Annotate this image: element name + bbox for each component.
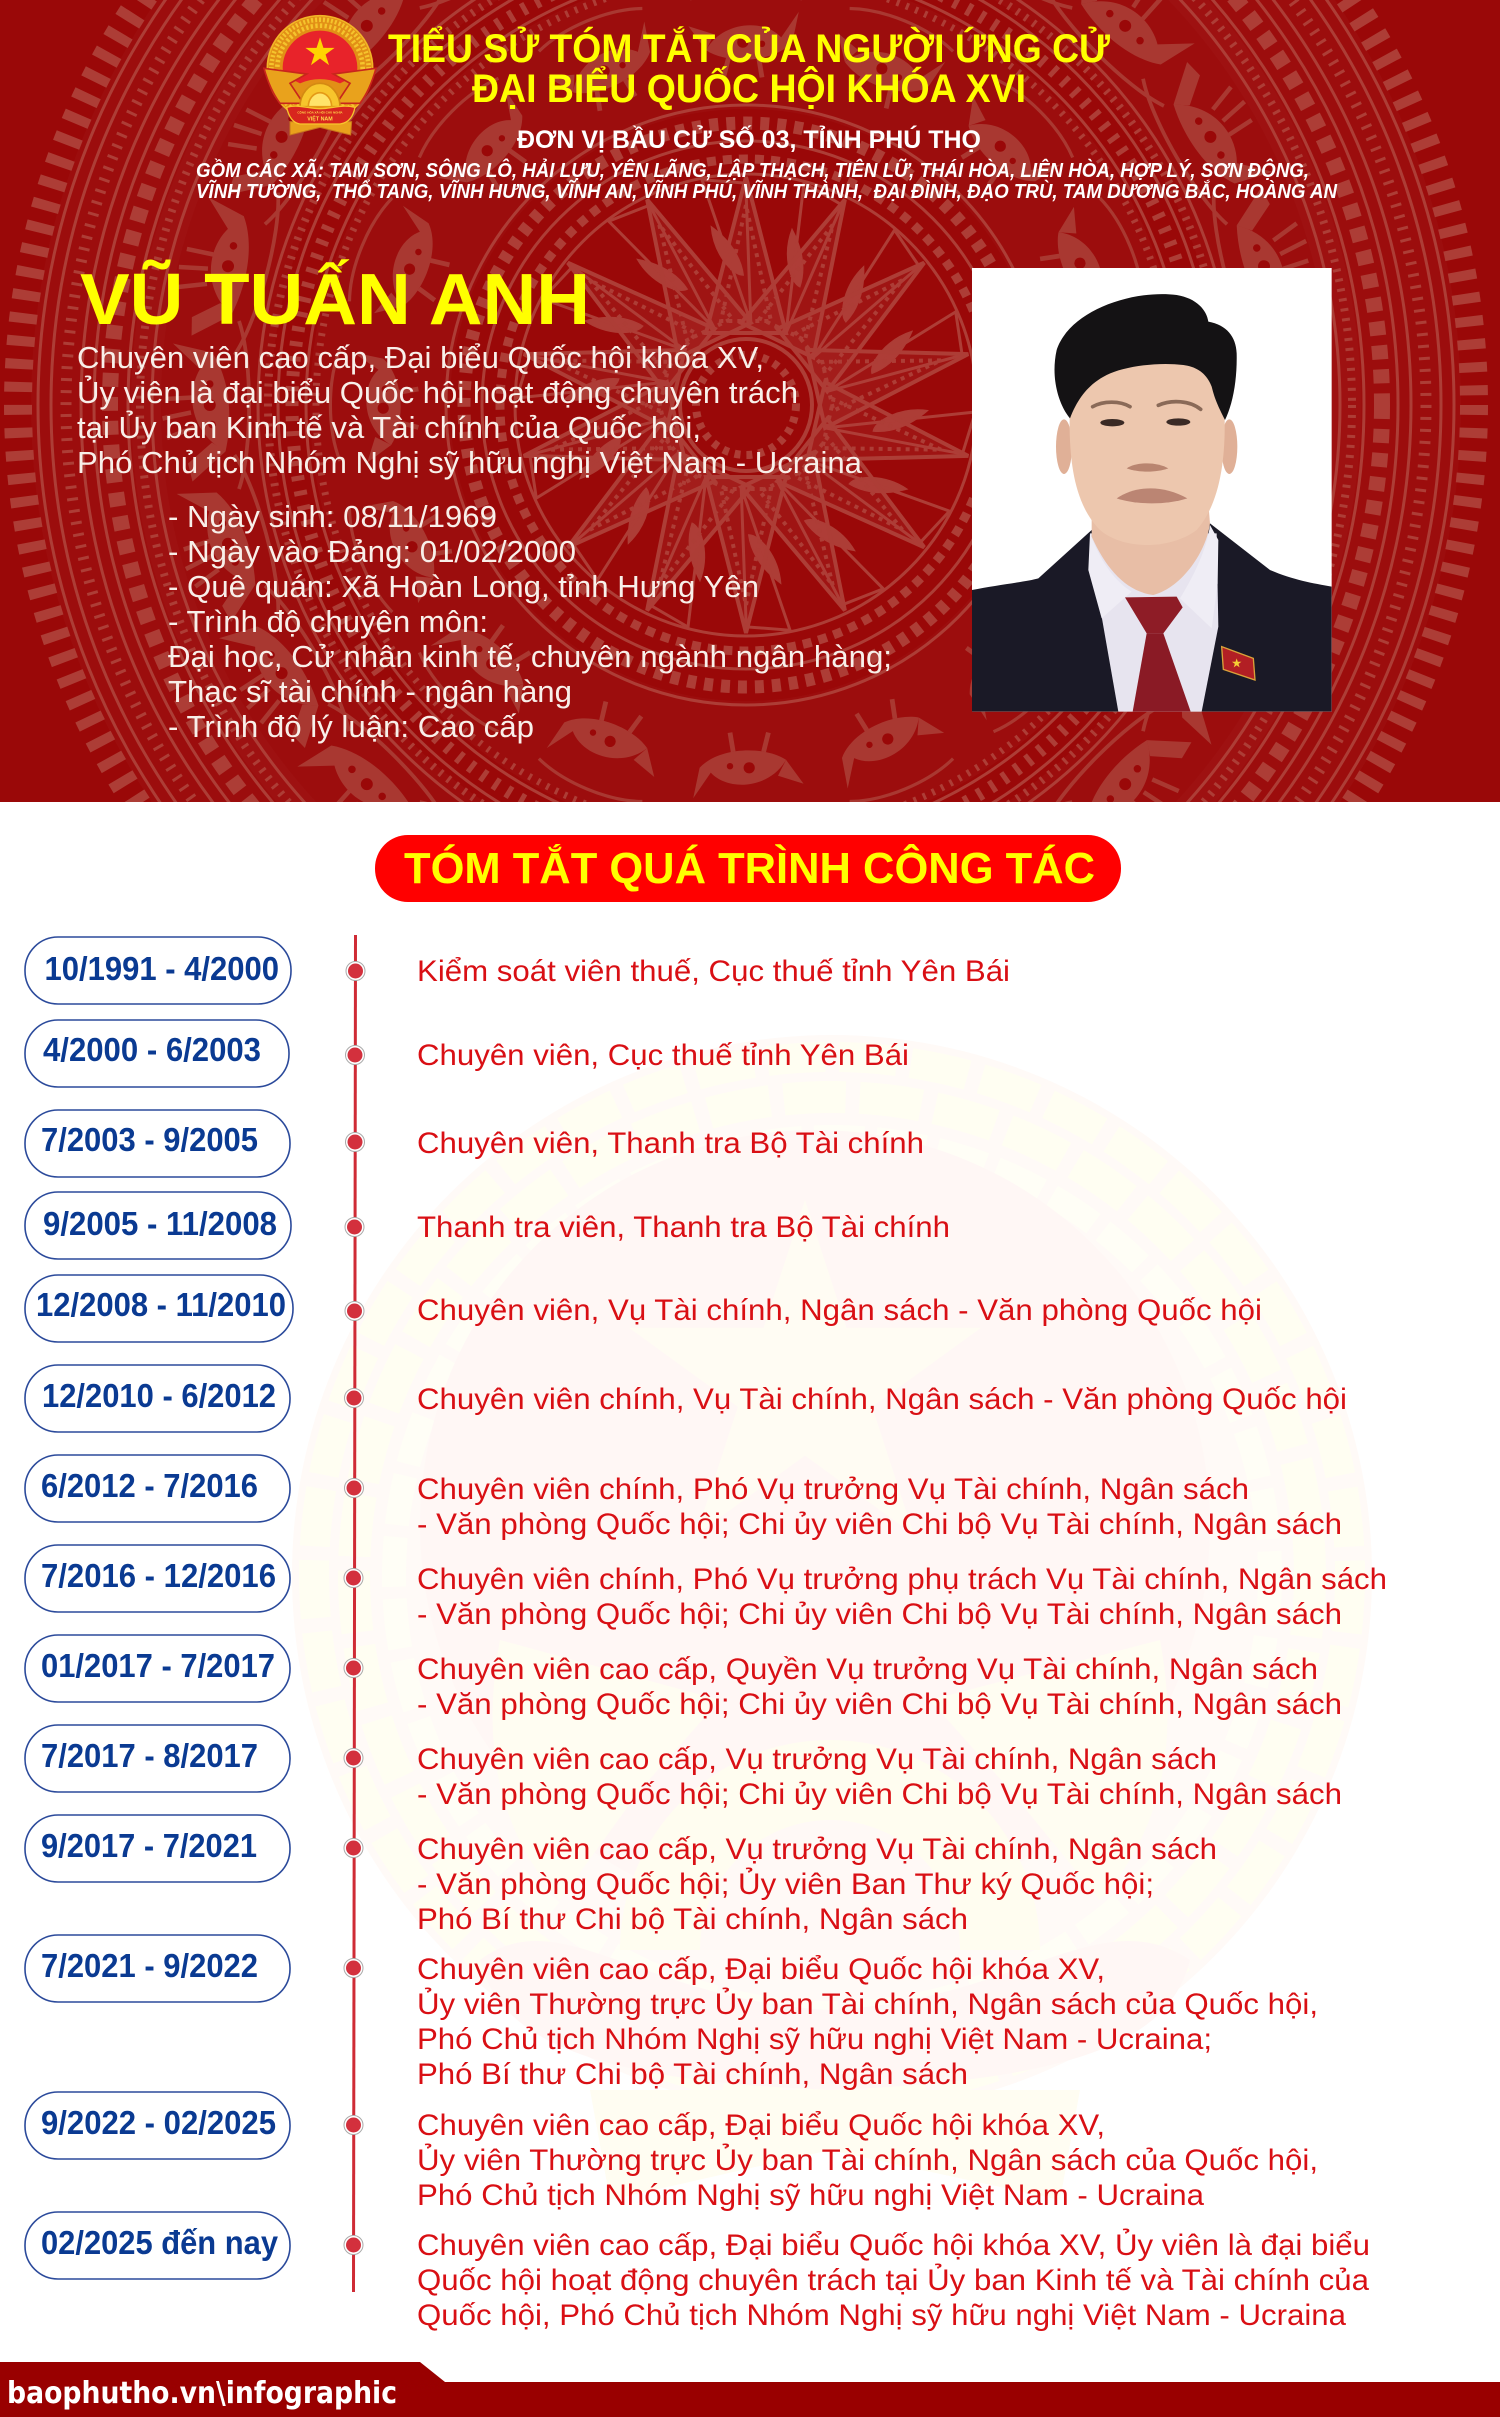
description: Quốc hội, Phó Chủ tịch Nhóm Nghị sỹ hữu nghị Việt Nam - Ucraina — [417, 2299, 1346, 2332]
marker — [344, 1388, 364, 1408]
description: Chuyên viên cao cấp, Vụ trưởng Vụ Tài chính, Ngân sách — [417, 1743, 1217, 1776]
text block: personal details: Thạc sĩ tài chính - ngân hàng — [168, 674, 572, 709]
timeline row 4 — [25, 1192, 950, 1259]
date pill: 7/2003 - 9/2005 — [41, 1121, 258, 1158]
text block: positions: Ủy viên là đại biểu Quốc hội hoạt động chuyên trách — [77, 374, 798, 410]
description: Chuyên viên chính, Phó Vụ trưởng phụ trách Vụ Tài chính, Ngân sách — [417, 1563, 1387, 1596]
icon: national emblem of Vietnam: VIỆT NAM — [307, 114, 333, 122]
marker — [346, 1132, 364, 1152]
date pill: 01/2017 - 7/2017 — [41, 1647, 275, 1684]
title — [388, 24, 1111, 111]
description: - Văn phòng Quốc hội; Ủy viên Ban Thư ký Quốc hội; — [417, 1867, 1154, 1901]
description — [417, 1743, 1342, 1811]
date pill — [25, 1455, 290, 1522]
icon: national emblem of Vietnam: CỘNG HÒA XÃ HỘI CHỦ NGHĨA — [297, 109, 343, 114]
text block: personal details: - Trình độ lý luận: Cao cấp — [168, 709, 534, 744]
timeline row 5 — [25, 1275, 1262, 1342]
description — [417, 1953, 1318, 2091]
timeline row 9 — [25, 1635, 1342, 1721]
date pill — [25, 1545, 290, 1612]
description: - Văn phòng Quốc hội; Chi ủy viên Chi bộ Vụ Tài chính, Ngân sách — [417, 1508, 1342, 1541]
timeline row 7 — [25, 1455, 1342, 1541]
marker — [344, 1478, 364, 1498]
timeline row 8 — [25, 1545, 1387, 1631]
description — [417, 2228, 1370, 2332]
text block: positions: Phó Chủ tịch Nhóm Nghị sỹ hữu nghị Việt Nam - Ucraina — [77, 445, 863, 480]
date pill: 9/2022 - 02/2025 — [41, 2104, 276, 2141]
bronze drum background pattern — [4, 0, 1488, 802]
marker — [344, 1748, 363, 1768]
description: Phó Chủ tịch Nhóm Nghị sỹ hữu nghị Việt Nam - Ucraina; — [417, 2023, 1212, 2056]
date pill: 7/2017 - 8/2017 — [41, 1737, 258, 1774]
footer bar — [0, 2362, 1500, 2417]
text block: communes: GỒM CÁC XÃ: TAM SƠN, SÔNG LÔ, HẢI LỰU, YÊN LÃNG, LẬP THẠCH, TIÊN LỮ, THÁI HÒA, LIÊN HÒA, HỢP LÝ, SƠN ĐỘNG, — [196, 158, 1309, 182]
footer bar: baophutho.vn\infographic — [7, 2376, 397, 2411]
date pill — [25, 937, 291, 1004]
marker — [344, 2116, 363, 2134]
text block: personal details: - Trình độ chuyên môn: — [168, 604, 488, 639]
description: - Văn phòng Quốc hội; Chi ủy viên Chi bộ Vụ Tài chính, Ngân sách — [417, 1598, 1342, 1631]
timeline row 11 — [25, 1815, 1217, 1936]
description: Chuyên viên cao cấp, Đại biểu Quốc hội khóa XV, — [417, 2109, 1105, 2142]
description: Ủy viên Thường trực Ủy ban Tài chính, Ngân sách của Quốc hội, — [417, 1987, 1318, 2021]
description: Chuyên viên cao cấp, Đại biểu Quốc hội khóa XV, Ủy viên là đại biểu — [417, 2228, 1370, 2262]
date pill: 9/2005 - 11/2008 — [43, 1205, 277, 1242]
date pill — [25, 1935, 290, 2002]
timeline row 1 — [25, 937, 1010, 1004]
description: Chuyên viên cao cấp, Đại biểu Quốc hội khóa XV, — [417, 1953, 1105, 1986]
timeline row 6 — [25, 1365, 1347, 1432]
date pill — [25, 2212, 290, 2279]
marker — [345, 1218, 364, 1236]
description: Chuyên viên, Thanh tra Bộ Tài chính — [417, 1127, 924, 1160]
text block: personal details: - Ngày sinh: 08/11/1969 — [168, 499, 497, 534]
icon: national emblem of Vietnam — [264, 16, 376, 135]
description — [417, 1563, 1387, 1631]
description: Ủy viên Thường trực Ủy ban Tài chính, Ngân sách của Quốc hội, — [417, 2143, 1318, 2177]
marker — [344, 1658, 363, 1678]
date pill — [25, 1020, 289, 1087]
panel: header band — [0, 0, 1500, 802]
text block: positions: Chuyên viên cao cấp, Đại biểu Quốc hội khóa XV, — [77, 340, 764, 375]
marker — [345, 1302, 364, 1320]
description: - Văn phòng Quốc hội; Chi ủy viên Chi bộ Vụ Tài chính, Ngân sách — [417, 1688, 1342, 1721]
description: Quốc hội hoạt động chuyên trách tại Ủy ban Kinh tế và Tài chính của — [417, 2263, 1369, 2297]
portrait photo — [972, 268, 1332, 712]
text block: personal details: - Quê quán: Xã Hoàn Long, tỉnh Hưng Yên — [168, 569, 759, 604]
text block: personal details — [168, 499, 892, 744]
marker — [344, 1958, 363, 1978]
timeline axis — [354, 935, 356, 2292]
date pill — [25, 1275, 293, 1342]
date pill — [25, 1725, 290, 1792]
date pill: 02/2025 đến nay — [41, 2224, 279, 2261]
marker — [346, 962, 365, 980]
text block: positions — [77, 340, 863, 480]
date pill: 4/2000 - 6/2003 — [43, 1031, 261, 1068]
description: - Văn phòng Quốc hội; Chi ủy viên Chi bộ Vụ Tài chính, Ngân sách — [417, 1778, 1342, 1811]
description — [417, 1653, 1342, 1721]
text block: positions: tại Ủy ban Kinh tế và Tài chính của Quốc hội, — [77, 409, 701, 445]
date pill: 10/1991 - 4/2000 — [44, 950, 279, 987]
timeline row 13 — [25, 2092, 1318, 2212]
heading: candidate name: VŨ TUẤN ANH — [80, 259, 590, 340]
timeline row 14 — [25, 2212, 1370, 2332]
date pill — [25, 1192, 291, 1259]
marker — [346, 1046, 364, 1064]
watermark: faded national emblem — [292, 1035, 1372, 2200]
date pill: 7/2021 - 9/2022 — [41, 1947, 258, 1984]
date pill — [25, 2092, 290, 2159]
marker — [344, 2236, 363, 2254]
text block: communes — [196, 158, 1338, 203]
description: Phó Chủ tịch Nhóm Nghị sỹ hữu nghị Việt Nam - Ucraina — [417, 2179, 1204, 2212]
date pill — [25, 1815, 290, 1882]
timeline row 10 — [25, 1725, 1342, 1811]
marker — [344, 1838, 363, 1858]
description: Thanh tra viên, Thanh tra Bộ Tài chính — [417, 1211, 950, 1244]
timeline row 12 — [25, 1935, 1318, 2091]
subtitle: constituency: ĐƠN VỊ BẦU CỬ SỐ 03, TỈNH PHÚ THỌ — [517, 124, 981, 154]
description: Chuyên viên chính, Vụ Tài chính, Ngân sách - Văn phòng Quốc hội — [417, 1383, 1347, 1416]
marker — [344, 1568, 363, 1588]
description: Chuyên viên, Cục thuế tỉnh Yên Bái — [417, 1039, 909, 1072]
description — [417, 1473, 1342, 1541]
date pill: 6/2012 - 7/2016 — [41, 1467, 258, 1504]
date pill: 12/2008 - 11/2010 — [36, 1286, 286, 1323]
heading: career summary pill — [375, 835, 1121, 902]
title: TIỂU SỬ TÓM TẮT CỦA NGƯỜI ỨNG CỬ — [388, 24, 1111, 71]
date pill — [25, 1110, 290, 1177]
description — [417, 1833, 1217, 1936]
description: Phó Bí thư Chi bộ Tài chính, Ngân sách — [417, 2058, 968, 2091]
description — [417, 2109, 1318, 2212]
text block: personal details: - Ngày vào Đảng: 01/02/2000 — [168, 534, 576, 569]
description: Chuyên viên chính, Phó Vụ trưởng Vụ Tài chính, Ngân sách — [417, 1473, 1249, 1506]
date pill — [25, 1365, 290, 1432]
description: Phó Bí thư Chi bộ Tài chính, Ngân sách — [417, 1903, 968, 1936]
date pill: 7/2016 - 12/2016 — [41, 1557, 276, 1594]
heading: career summary pill: TÓM TẮT QUÁ TRÌNH CÔNG TÁC — [404, 842, 1095, 893]
date pill: 12/2010 - 6/2012 — [42, 1377, 276, 1414]
text block: personal details: Đại học, Cử nhân kinh tế, chuyên ngành ngân hàng; — [168, 639, 892, 674]
title: ĐẠI BIỂU QUỐC HỘI KHÓA XVI — [472, 64, 1026, 111]
description: Chuyên viên cao cấp, Vụ trưởng Vụ Tài chính, Ngân sách — [417, 1833, 1217, 1866]
description: Kiểm soát viên thuế, Cục thuế tỉnh Yên Bái — [417, 955, 1010, 988]
date pill: 9/2017 - 7/2021 — [41, 1827, 257, 1864]
description: Chuyên viên, Vụ Tài chính, Ngân sách - Văn phòng Quốc hội — [417, 1294, 1262, 1327]
timeline row 2 — [25, 1020, 909, 1087]
description: Chuyên viên cao cấp, Quyền Vụ trưởng Vụ Tài chính, Ngân sách — [417, 1653, 1318, 1686]
date pill — [25, 1635, 290, 1702]
timeline row 3 — [25, 1110, 924, 1177]
text block: communes: VĨNH TƯỜNG, THỔ TANG, VĨNH HƯNG, VĨNH AN, VĨNH PHÚ, VĨNH THÀNH, ĐẠI ĐÌNH, ĐẠO TRÙ, TAM DƯƠNG BẮC, HOÀNG AN — [196, 179, 1338, 203]
